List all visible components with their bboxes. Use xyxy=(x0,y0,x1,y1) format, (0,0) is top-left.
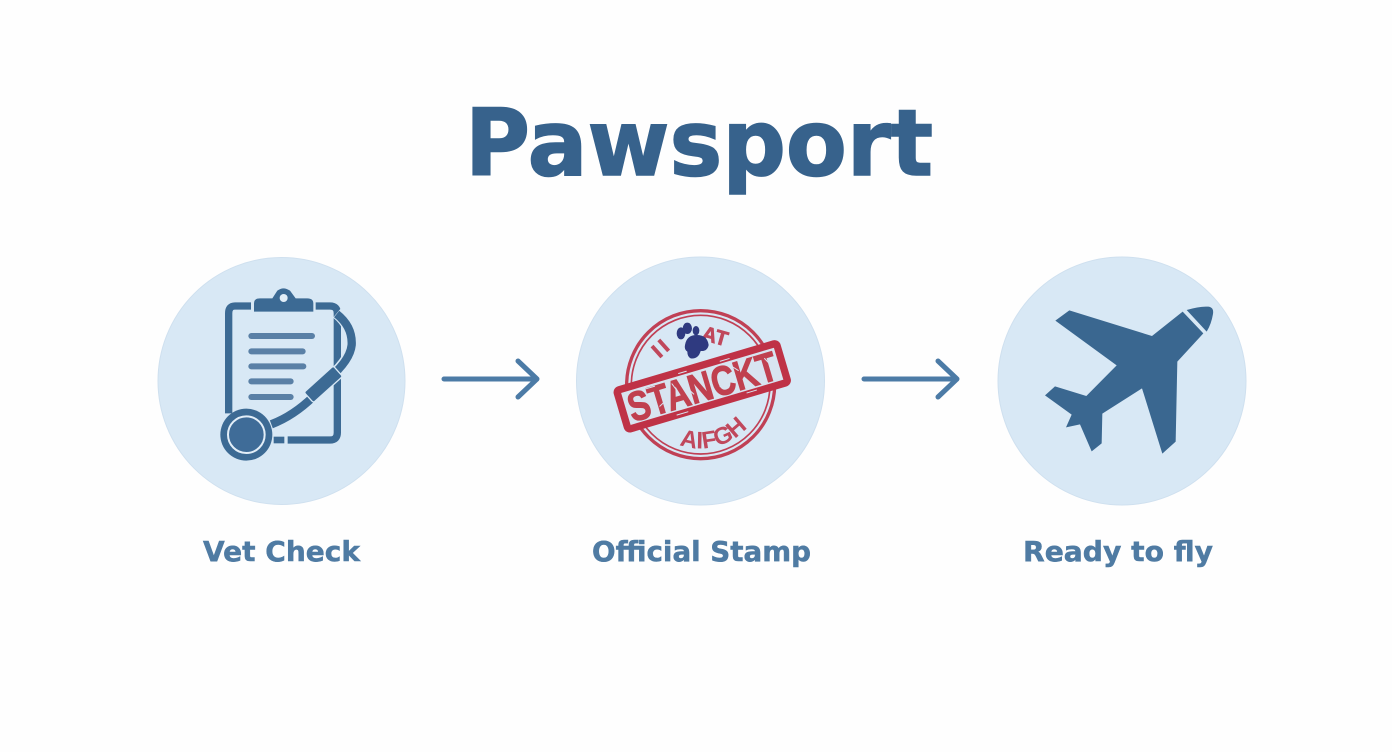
stamp bottom text xyxy=(679,418,754,448)
label: ready to fly: Ready to fly xyxy=(1023,535,1213,568)
icon: red stamp with paw xyxy=(614,309,791,460)
circle: vet check background xyxy=(158,258,405,504)
icon: red stamp with paw: AIFGH xyxy=(680,416,747,449)
icon: red stamp with paw: AT xyxy=(699,322,731,351)
circle: official stamp background xyxy=(576,257,824,505)
arrow: step 2 to step 3 xyxy=(864,361,957,397)
title: Pawsport xyxy=(465,90,933,197)
stamp top text: II xyxy=(648,336,674,362)
icon: airplane xyxy=(1045,307,1213,454)
icon: paw xyxy=(677,323,709,358)
arrow: step 1 to step 2 xyxy=(444,361,537,397)
step 2: official stamp xyxy=(576,256,825,568)
step 1: vet check xyxy=(158,258,405,568)
label: vet check: Vet Check xyxy=(203,535,361,568)
step 3: ready to fly xyxy=(998,257,1246,568)
label: official stamp: Official Stamp xyxy=(592,535,811,568)
stamp band: STANCKT xyxy=(622,343,783,431)
circle: ready to fly background xyxy=(998,257,1246,505)
icon: clipboard with stethoscope xyxy=(220,288,352,461)
